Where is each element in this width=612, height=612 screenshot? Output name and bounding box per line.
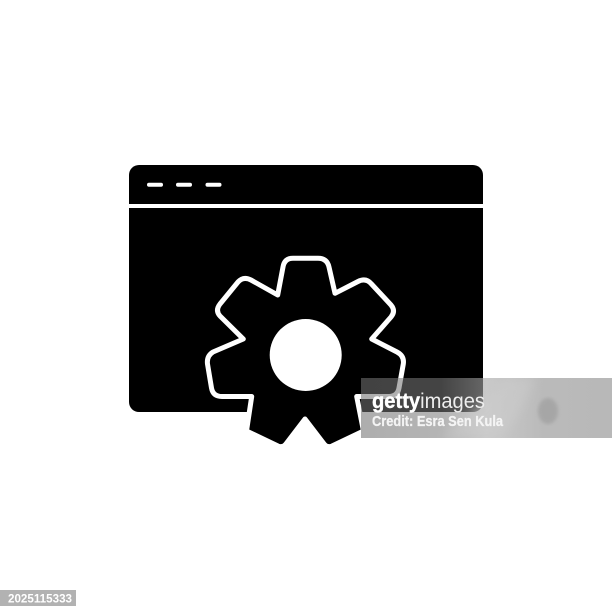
watermark blurred circle [538,398,558,424]
icon: browser window [129,165,483,412]
gear hub [270,319,342,391]
id number: 2025115333 [8,594,72,606]
watermark credit text: Credit: Esra Sen Kula [372,414,504,430]
id background [0,590,76,606]
watermark background [361,378,612,438]
watermark light sweep [466,396,483,412]
window body [129,165,483,412]
infographic canvas [0,165,612,606]
image id tag [0,590,76,606]
title bar divider [129,204,483,208]
window control dashes [147,183,222,187]
watermark band [361,378,612,438]
watermark logo text: gettyimages [372,390,485,413]
gear body [207,258,403,447]
icon: gear [207,258,403,447]
